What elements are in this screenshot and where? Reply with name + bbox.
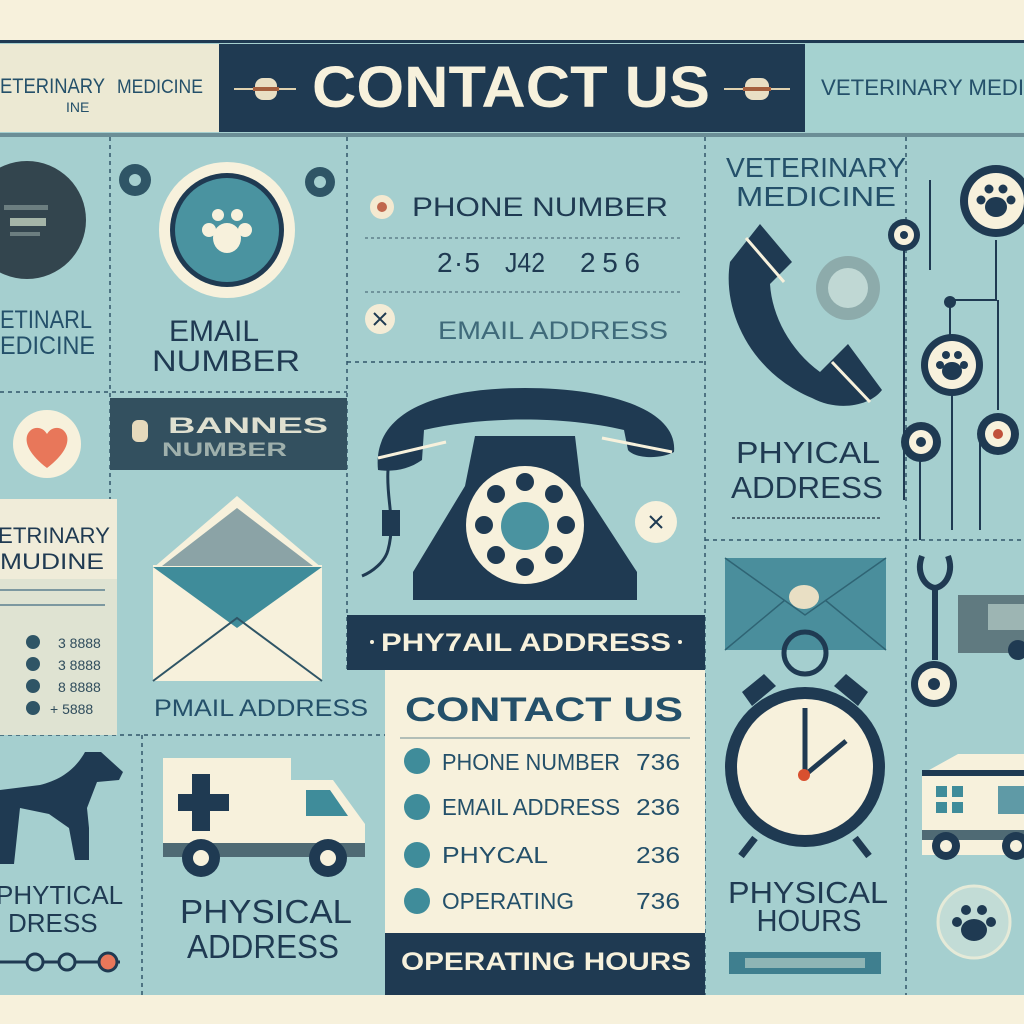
- panel: header left band: INE: [66, 99, 89, 115]
- banner: business number: [110, 398, 347, 470]
- text: physical hours: HOURS: [756, 903, 862, 938]
- icon: email number paw badge: [159, 162, 295, 298]
- panel: header left band: ETERINARY: [0, 75, 105, 98]
- icon: network of paw nodes: [888, 165, 1024, 540]
- panel: veterinary list card: 3 8888: [58, 657, 101, 673]
- text: physical address right: PHYICAL: [736, 435, 880, 470]
- text: phone number panel: PHONE NUMBER: [412, 192, 668, 222]
- text: email number: NUMBER: [152, 345, 300, 378]
- icon: small envelope: [725, 558, 886, 650]
- text: phone number panel: J42: [505, 247, 545, 278]
- panel: contact card: PHONE NUMBER: [442, 749, 620, 775]
- text: physical address: PHYSICAL: [180, 893, 352, 930]
- panel: contact card: EMAIL ADDRESS: [442, 794, 620, 820]
- icon: alarm clock: [725, 632, 885, 856]
- panel: contact card: [385, 670, 705, 933]
- icon: heart: [13, 410, 81, 478]
- panel: veterinary list card: ETRINARY: [0, 523, 110, 548]
- icon: small badges: [119, 164, 335, 197]
- panel: contact card: PHYCAL: [442, 842, 548, 868]
- icon: rotary telephone: [362, 388, 677, 600]
- panel: veterinary list card: [0, 499, 117, 735]
- banner: business number: NUMBER: [162, 440, 287, 461]
- banner: business number: BANNES: [168, 413, 328, 438]
- title banner: CONTACT US: [312, 55, 710, 120]
- panel: contact card: 736: [636, 888, 680, 914]
- panel: contact card: 236: [636, 794, 680, 820]
- text: physical hours: PHYSICAL: [728, 875, 888, 910]
- panel: contact card: CONTACT US: [405, 691, 683, 729]
- banner: operating hours: [385, 933, 705, 995]
- text: veterinary medicine left: EDICINE: [0, 332, 95, 360]
- panel: contact card: OPERATING: [442, 888, 574, 914]
- text: veterinary medicine right: VETERINARY: [726, 152, 906, 183]
- text: veterinary medicine left: ETINARL: [0, 306, 92, 334]
- text: physical address: ADDRESS: [187, 928, 339, 965]
- text: phone number panel: EMAIL ADDRESS: [438, 317, 668, 345]
- text: email number: EMAIL: [169, 315, 259, 348]
- text: veterinary medicine left: [0, 306, 95, 360]
- legend strip: bottom right: [729, 952, 881, 974]
- icon: dog: [0, 752, 123, 864]
- panel: header left band: MEDICINE: [117, 77, 203, 98]
- banner: operating hours: OPERATING HOURS: [401, 948, 691, 976]
- text: phone number panel: 2·5: [437, 247, 480, 278]
- title banner: [219, 44, 805, 132]
- icon: bottom left dots: [0, 953, 120, 971]
- banner: phytail address: [347, 615, 705, 670]
- icon: building vehicle: [922, 754, 1024, 860]
- text: pmail address: PMAIL ADDRESS: [154, 695, 368, 722]
- icon: phone handset: [729, 224, 882, 406]
- panel: veterinary list card: 8 8888: [58, 679, 101, 695]
- text: phone number panel: [365, 192, 680, 345]
- panel: contact card: 736: [636, 749, 680, 775]
- icon: faint round stamp: [816, 256, 880, 320]
- text: physical address left: DRESS: [8, 908, 98, 938]
- panel: header right band: [805, 44, 1024, 132]
- icon: ambulance truck: [163, 758, 365, 877]
- text: veterinary medicine right: MEDICINE: [736, 181, 896, 212]
- panel: veterinary list card: 3 8888: [58, 635, 101, 651]
- panel: header right band: VETERINARY MEDI: [821, 75, 1024, 100]
- icon: bottom paw badge: [938, 886, 1010, 958]
- panel: veterinary list card: MUDINE: [0, 549, 104, 574]
- text: physical hours: [728, 875, 888, 938]
- text: phone number panel: 256: [580, 247, 640, 278]
- panel: veterinary list card: + 5888: [50, 701, 93, 717]
- panel: contact card: 236: [636, 842, 680, 868]
- icon: envelope: [153, 496, 322, 681]
- text: physical address right: ADDRESS: [731, 470, 883, 505]
- panel: top-left dark circle: [0, 161, 86, 279]
- icon: wrench and van: [911, 556, 1024, 707]
- panel: header left band: [0, 44, 219, 132]
- banner: phytail address: PHY7AIL ADDRESS: [381, 629, 671, 657]
